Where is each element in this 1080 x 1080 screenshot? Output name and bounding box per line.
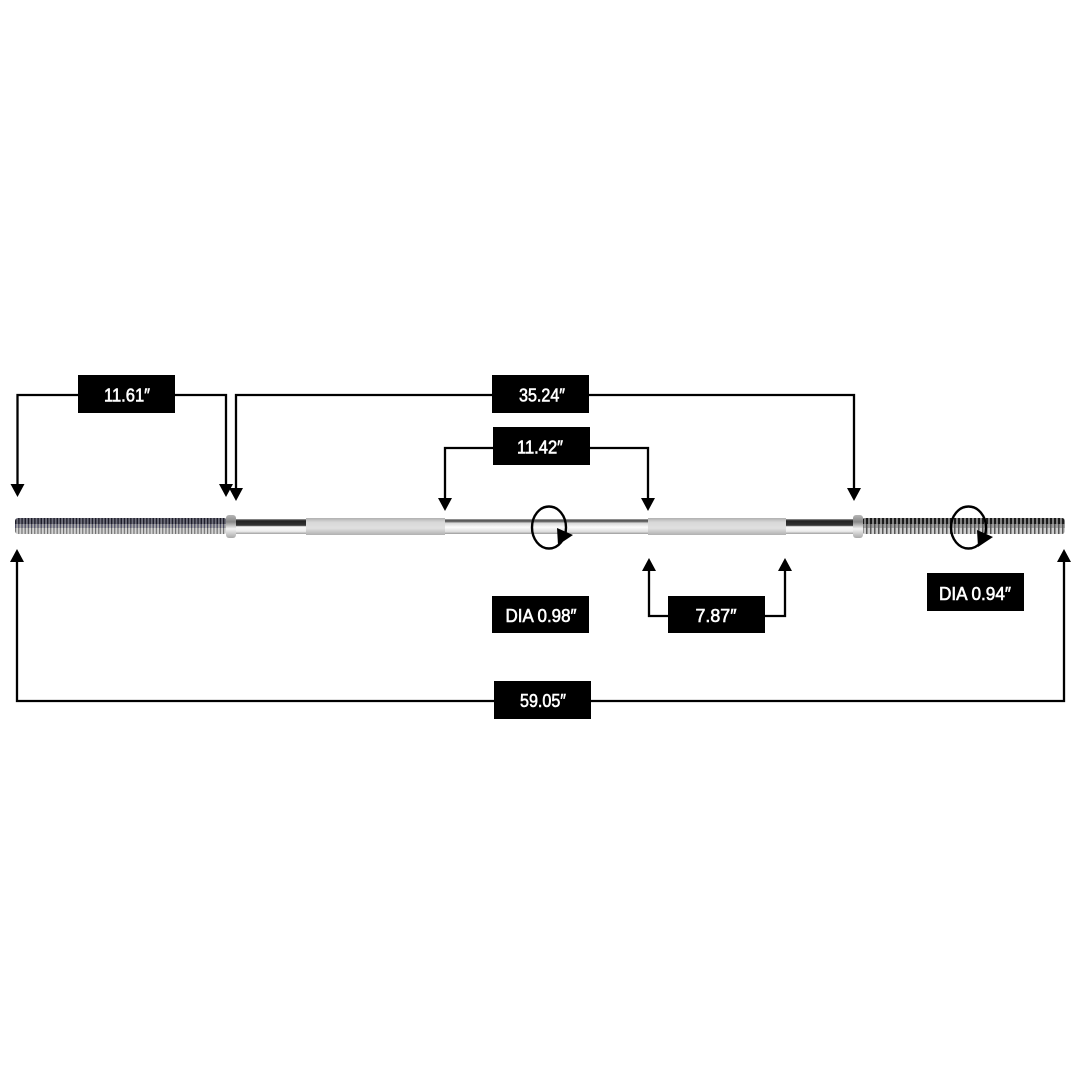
left knurled grip — [306, 518, 445, 535]
barbell — [15, 515, 1065, 538]
dimension 59.05 inches: 59.05″ — [520, 691, 567, 711]
label: DIA 0.98 inches: DIA 0.98″ — [506, 606, 577, 626]
dimension 11.42 inches: 11.42″ — [517, 438, 564, 458]
dimension 35.24 inches: 35.24″ — [519, 386, 566, 406]
label: DIA 0.94 inches: DIA 0.94″ — [939, 584, 1012, 604]
label: DIA 0.98 inches — [492, 596, 589, 633]
icon: rotation arrow, thread diameter — [951, 506, 993, 548]
right threaded end — [862, 518, 1065, 534]
left collar — [226, 515, 236, 538]
right outer chrome shaft — [786, 519, 855, 534]
dimension 7.87 inches — [642, 558, 792, 633]
icon: rotation arrow, bar diameter — [532, 506, 573, 548]
dimension 11.61 inches — [10, 375, 233, 497]
label: DIA 0.94 inches — [927, 573, 1024, 611]
left threaded end — [15, 518, 227, 534]
left outer chrome shaft — [234, 519, 308, 534]
dimension 35.24 inches — [229, 375, 861, 501]
right collar — [853, 515, 863, 538]
right knurled grip — [648, 518, 786, 535]
dimension 7.87 inches: 7.87″ — [696, 606, 737, 626]
centre chrome shaft — [445, 519, 649, 534]
dimension 11.42 inches — [438, 427, 655, 511]
dimension 11.61 inches: 11.61″ — [104, 386, 151, 406]
dimension 59.05 inches — [10, 549, 1071, 719]
